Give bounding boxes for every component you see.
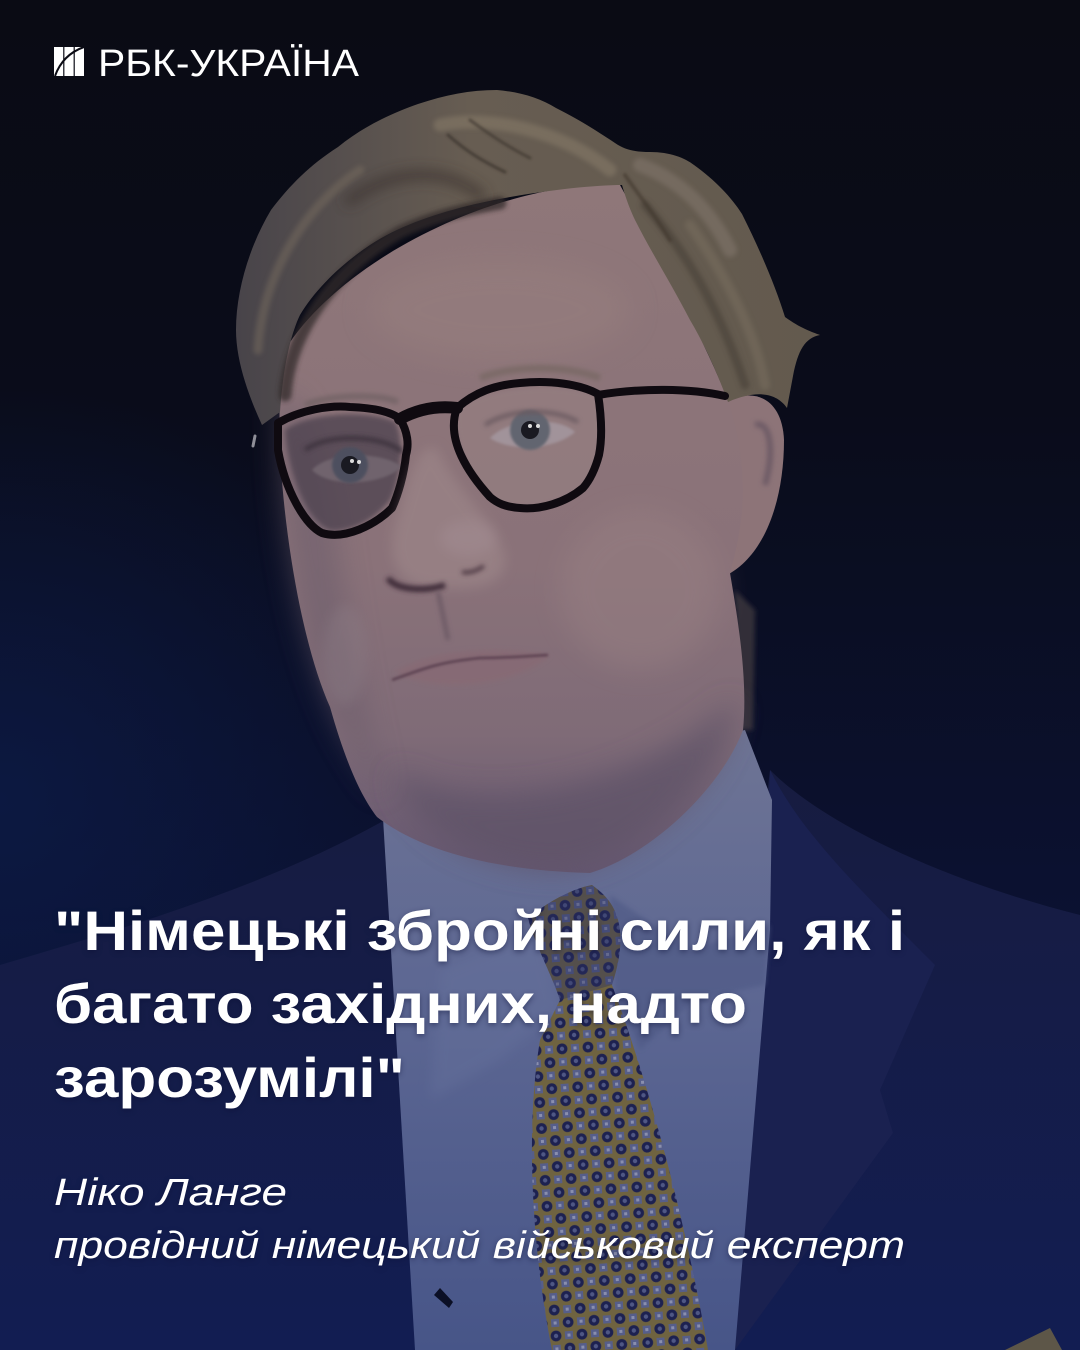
- left collar fold: [430, 930, 560, 1100]
- hair: [236, 90, 820, 425]
- right cheek highlight: [560, 510, 720, 670]
- forehead highlight: [370, 260, 630, 360]
- quote headline: "Німецькі збройні сили, як і: [54, 899, 905, 962]
- pocket square: [1005, 1328, 1062, 1350]
- shirt collar fold: [610, 895, 770, 1050]
- right eye: [485, 410, 578, 450]
- jacket: [0, 770, 1080, 1350]
- chin shadow: [395, 700, 735, 870]
- ear: [727, 396, 784, 575]
- hair strands: [258, 120, 765, 395]
- eyebrow right: [480, 368, 600, 378]
- lapel mic: [434, 1288, 453, 1308]
- left eye: [305, 438, 402, 483]
- glasses: [253, 382, 725, 535]
- mouth line: [392, 655, 548, 680]
- logo wordmark: РБК-УКРАЇНА: [98, 43, 360, 85]
- tie: [528, 885, 708, 1350]
- quote headline: [54, 899, 905, 1109]
- quote headline: зарозумілі": [54, 1046, 405, 1109]
- logo: [54, 43, 360, 85]
- jacket lapel: [705, 770, 935, 1350]
- attribution: Ніко Ланге: [54, 1172, 287, 1214]
- quote headline: багато західних, надто: [54, 972, 747, 1035]
- tie knot shade: [528, 885, 620, 1000]
- nostril left: [388, 578, 445, 589]
- logo mark: [54, 47, 84, 76]
- nasolabial patch: [323, 605, 367, 705]
- hair behind neck: [735, 590, 755, 730]
- nose highlight: [440, 520, 496, 556]
- face: [279, 185, 744, 873]
- nose: [392, 448, 505, 588]
- nostril right: [462, 566, 484, 573]
- left cheek shading: [280, 390, 385, 800]
- lips: [395, 650, 550, 685]
- attribution: провідний німецький військовий експерт: [54, 1225, 905, 1267]
- attribution: [54, 1172, 905, 1267]
- nasolabial crease: [438, 592, 448, 640]
- left lens tint: [285, 414, 400, 530]
- shirt: [383, 730, 772, 1350]
- eyebrow left: [305, 396, 398, 405]
- right lens tint: [456, 387, 600, 506]
